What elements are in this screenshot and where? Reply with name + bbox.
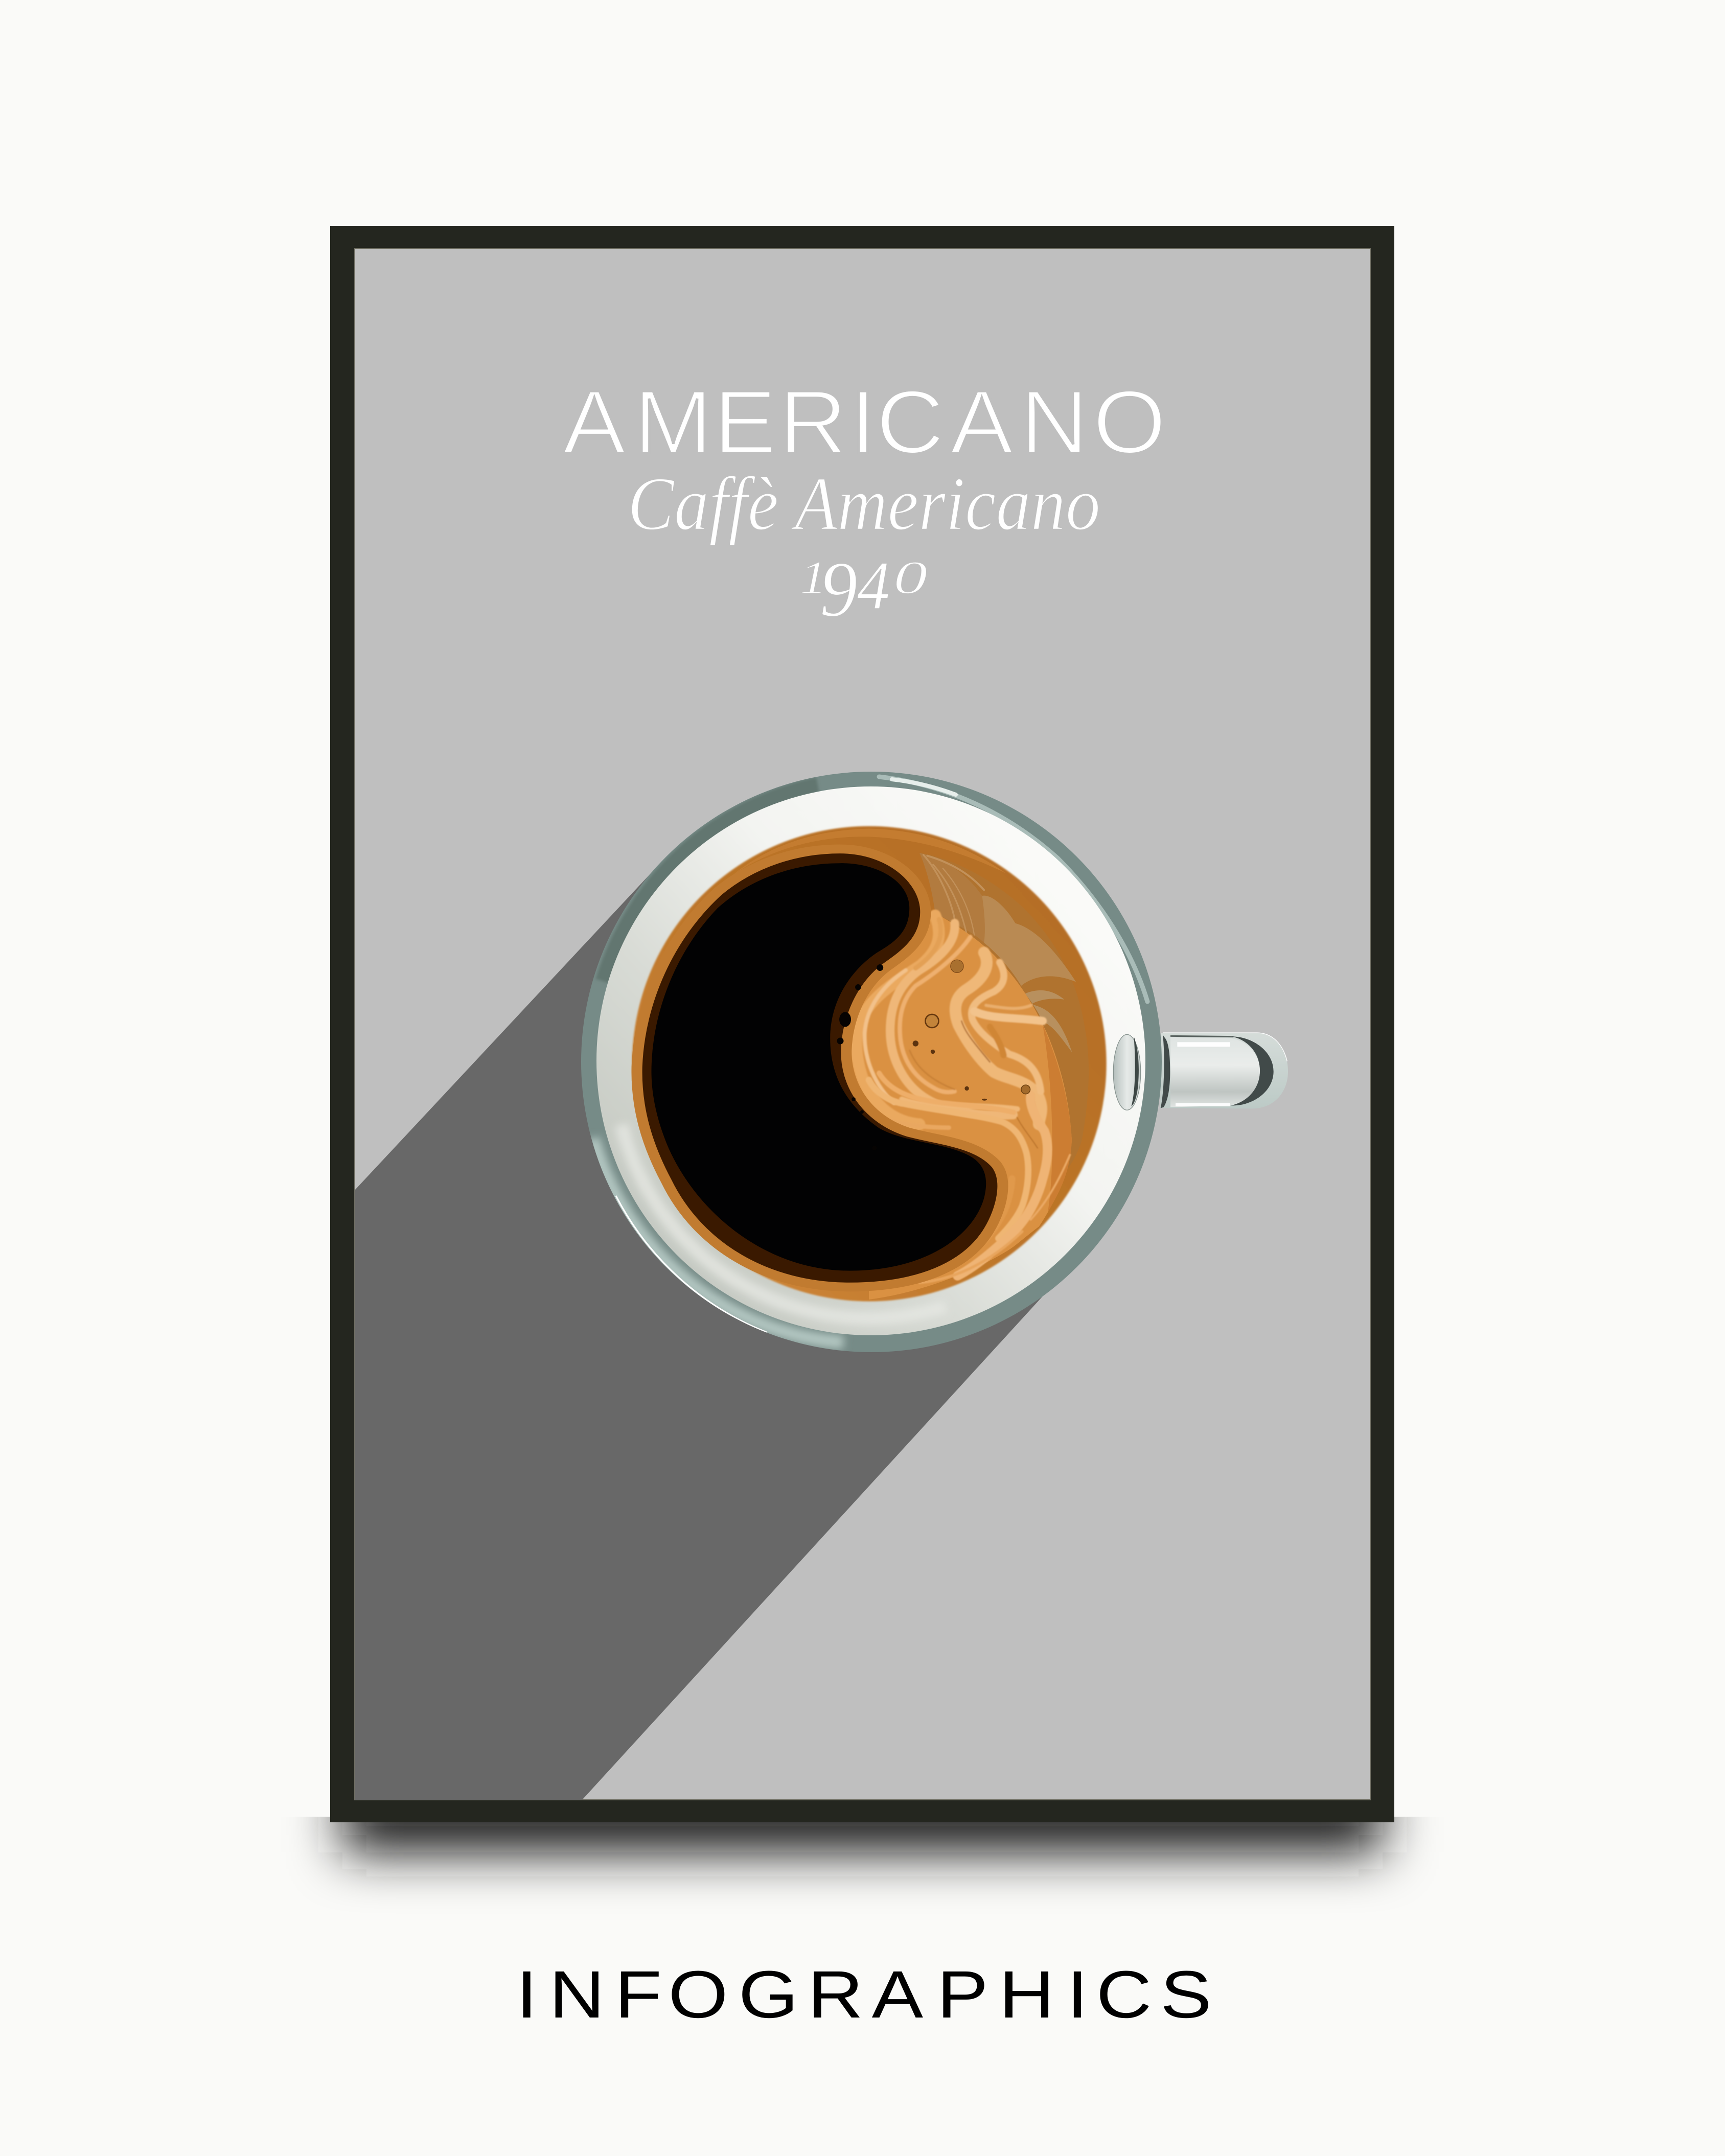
translucent reflection, upper right	[919, 853, 1089, 1186]
rim shading	[593, 777, 1147, 1342]
long cup shadow	[355, 864, 1078, 1800]
crema reflections and swirl	[732, 828, 1089, 1300]
ceramic lower sheen	[622, 1125, 946, 1318]
foam right shade	[1043, 1025, 1072, 1212]
coffee surface	[632, 826, 1107, 1302]
handle	[1160, 1033, 1288, 1108]
title: AMERICANO: AMERICANO	[563, 372, 1166, 473]
year: 1940: 9	[820, 545, 858, 633]
foam streaks, lower	[869, 1073, 1070, 1283]
foam bubbles	[913, 960, 1030, 1101]
glass rim	[581, 772, 1162, 1352]
subtitle: Caffè Americano: Caffè Americano	[628, 461, 1100, 546]
year: 1940	[800, 545, 928, 633]
white ceramic wall	[596, 786, 1145, 1335]
frame drop shadow	[342, 1778, 1383, 1852]
footer wordmark: INFOGRAPHICS: INFOGRAPHICS	[516, 1957, 1212, 2032]
black coffee	[651, 863, 986, 1271]
upper crema band	[732, 828, 1006, 875]
rim lug	[1113, 1034, 1141, 1110]
halo bubbles	[837, 964, 883, 1150]
poster scene	[300, 226, 1425, 2019]
grey poster panel	[355, 248, 1370, 1800]
black picture frame	[330, 226, 1394, 1822]
foam body	[838, 913, 1072, 1300]
year: 1940: 0	[893, 551, 928, 604]
cup	[581, 772, 1288, 1352]
crema base	[632, 826, 1107, 1302]
foam streaks, upper	[857, 915, 1043, 1124]
year: 1940: 4	[857, 548, 890, 624]
year: 1940: 1	[800, 552, 827, 604]
dark coffee halo	[637, 849, 1003, 1287]
